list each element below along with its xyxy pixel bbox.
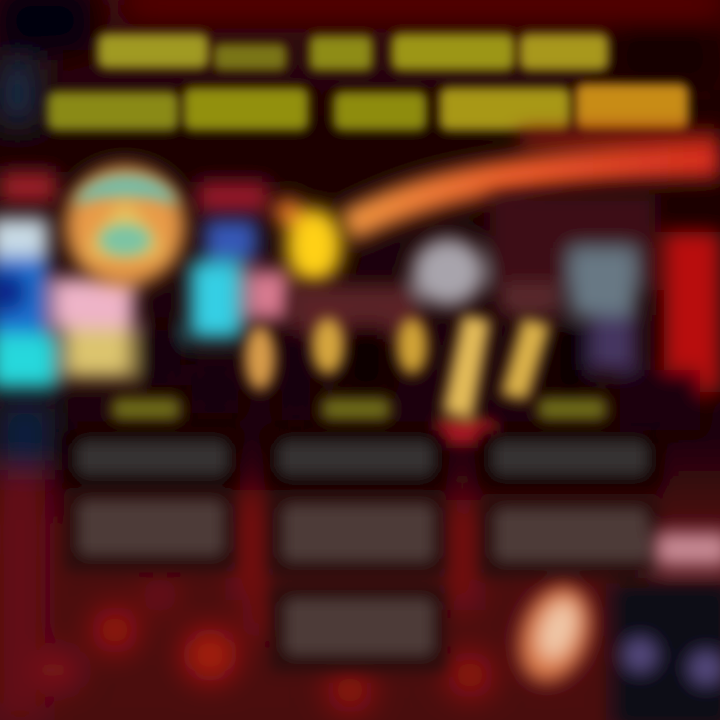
orb icon	[506, 575, 604, 693]
left hero figure	[0, 218, 290, 413]
column labels	[112, 398, 606, 420]
left red bands	[0, 172, 268, 212]
title line 2	[48, 84, 688, 130]
yellow glow	[274, 198, 342, 284]
right hero figures	[282, 195, 720, 430]
corner card	[612, 532, 720, 720]
column 2 panels	[266, 430, 446, 672]
column 1 panels	[62, 430, 238, 572]
circular badge	[65, 166, 185, 286]
orange swoosh banner	[340, 130, 720, 242]
golden candles	[245, 315, 550, 444]
column 3 panels	[478, 430, 662, 578]
title line 1	[98, 34, 608, 70]
